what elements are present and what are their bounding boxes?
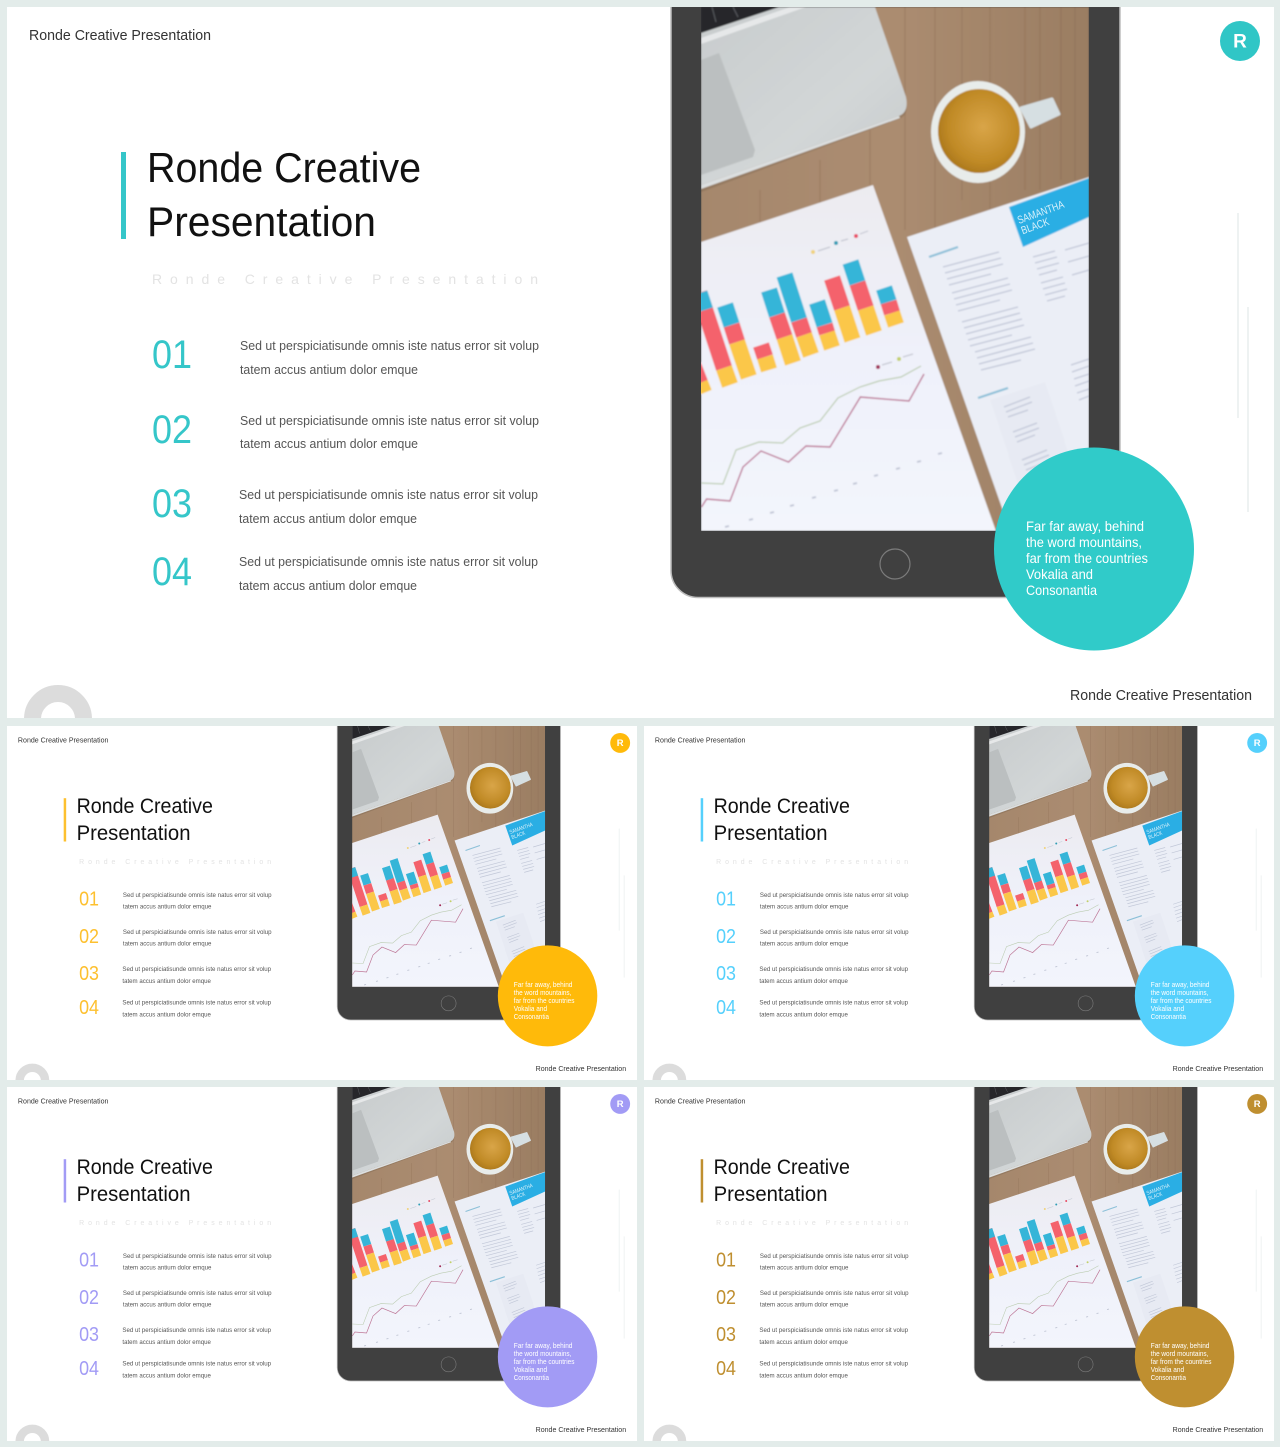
- item 04: 04: [79, 997, 99, 1019]
- item 02: Sed ut perspiciatisunde omnis iste natus error sit volup: [123, 1290, 272, 1297]
- item 02: 02: [716, 926, 736, 948]
- header label: Ronde Creative Presentation: [18, 1096, 108, 1105]
- tablet with desk photo: [671, 0, 1120, 598]
- subtitle: Ronde Creative Presentation: [79, 1220, 271, 1227]
- item 04: 04: [716, 1358, 736, 1380]
- logo badge: R: [617, 738, 624, 749]
- tablet with desk photo: BLACK: [1020, 216, 1051, 237]
- ring decoration: [20, 1429, 45, 1447]
- footer label: Ronde Creative Presentation: [1173, 1064, 1263, 1073]
- logo badge: R: [617, 1099, 624, 1110]
- item 04: [80, 1000, 271, 1018]
- item 03: Sed ut perspiciatisunde omnis iste natus error sit volup: [122, 966, 272, 973]
- logo badge: [610, 733, 630, 753]
- item 03: Sed ut perspiciatisunde omnis iste natus error sit volup: [122, 1327, 272, 1334]
- item 01: [80, 892, 272, 910]
- title accent bar: [64, 1159, 66, 1203]
- tablet with desk photo: SAMANTHA: [509, 1184, 534, 1197]
- title: [78, 798, 212, 840]
- slide 4: purple slide: [7, 1064, 637, 1447]
- title: Presentation: [714, 1183, 828, 1206]
- item 01: 01: [79, 889, 99, 911]
- callout circle: [498, 1306, 597, 1407]
- title: [150, 152, 420, 236]
- item 04: 04: [152, 550, 192, 594]
- callout circle: the word mountains,: [1026, 534, 1142, 550]
- item 02: [716, 929, 908, 947]
- item 01: [153, 340, 538, 376]
- item 03: tatem accus antium dolor emque: [759, 1339, 848, 1346]
- header label: Ronde Creative Presentation: [29, 28, 211, 44]
- tablet with desk photo: BLACK: [1148, 830, 1164, 841]
- item 02: Sed ut perspiciatisunde omnis iste natus error sit volup: [760, 1290, 909, 1297]
- callout circle: Vokalia and: [1151, 1006, 1184, 1013]
- item 03: [79, 1324, 272, 1346]
- item 04: Sed ut perspiciatisunde omnis iste natus error sit volup: [122, 1360, 272, 1367]
- title: Ronde Creative: [714, 1156, 850, 1179]
- slide 1: large teal slide: [7, 0, 1274, 744]
- callout circle: [994, 448, 1194, 650]
- item 01: tatem accus antium dolor emque: [760, 904, 849, 911]
- logo badge: [1247, 733, 1267, 753]
- item 02: 02: [152, 408, 192, 452]
- item 01: [79, 1250, 272, 1272]
- item 04: tatem accus antium dolor emque: [122, 1372, 211, 1379]
- title: Presentation: [714, 822, 828, 845]
- callout circle: [1135, 945, 1234, 1046]
- logo badge: R: [1254, 738, 1261, 749]
- item 04: tatem accus antium dolor emque: [239, 579, 417, 593]
- callout circle: Consonantia: [1151, 1375, 1186, 1382]
- item 03: tatem accus antium dolor emque: [122, 978, 211, 985]
- item 03: [153, 489, 538, 526]
- logo badge: [610, 1094, 630, 1114]
- item 02: tatem accus antium dolor emque: [240, 437, 418, 451]
- callout circle: Far far away, behind: [1026, 518, 1144, 534]
- tablet with desk photo: [974, 703, 1197, 1020]
- callout circle: [1135, 1306, 1234, 1407]
- footer label: Ronde Creative Presentation: [1070, 688, 1252, 704]
- item 03: Sed ut perspiciatisunde omnis iste natus error sit volup: [239, 488, 538, 502]
- title: Presentation: [77, 822, 191, 845]
- item 01: 01: [716, 1250, 736, 1272]
- callout circle: Consonantia: [1151, 1014, 1186, 1021]
- callout circle: the word mountains,: [1151, 1351, 1208, 1358]
- item 01: tatem accus antium dolor emque: [760, 1265, 849, 1272]
- item 04: Sed ut perspiciatisunde omnis iste natus error sit volup: [239, 555, 538, 569]
- item 04: 04: [79, 1358, 99, 1380]
- title: Presentation: [147, 198, 376, 245]
- callout circle: Vokalia and: [514, 1367, 547, 1374]
- title accent bar: [64, 798, 66, 842]
- footer label: Ronde Creative Presentation: [1173, 1425, 1263, 1434]
- item 04: Sed ut perspiciatisunde omnis iste natus error sit volup: [759, 1360, 909, 1367]
- title: [715, 798, 850, 840]
- callout circle: far from the countries: [1151, 1359, 1212, 1366]
- callout circle: Far far away, behind: [514, 982, 573, 989]
- callout circle: Vokalia and: [1026, 566, 1093, 582]
- slide 3: sky blue slide: [644, 703, 1274, 1093]
- callout circle: far from the countries: [1026, 550, 1148, 566]
- item 02: [153, 415, 538, 450]
- item 02: [716, 1287, 909, 1309]
- item 01: Sed ut perspiciatisunde omnis iste natus error sit volup: [240, 339, 539, 353]
- tablet with desk photo: BLACK: [511, 1191, 527, 1202]
- callout circle: far from the countries: [514, 998, 575, 1005]
- item 01: tatem accus antium dolor emque: [123, 904, 212, 911]
- item 02: [80, 929, 272, 947]
- slide 5: gold slide: [644, 1064, 1274, 1447]
- item 01: Sed ut perspiciatisunde omnis iste natus error sit volup: [760, 1253, 909, 1260]
- item 02: Sed ut perspiciatisunde omnis iste natus error sit volup: [240, 414, 539, 428]
- item 02: tatem accus antium dolor emque: [123, 1302, 212, 1309]
- title: Presentation: [77, 1183, 191, 1206]
- tablet with desk photo: [337, 1064, 560, 1381]
- callout circle: Far far away, behind: [1151, 1343, 1210, 1350]
- callout circle: far from the countries: [1151, 998, 1212, 1005]
- subtitle: Ronde Creative Presentation: [716, 859, 908, 866]
- tablet with desk photo: BLACK: [511, 830, 527, 841]
- logo badge: [1220, 21, 1260, 61]
- subtitle: Ronde Creative Presentation: [716, 1220, 908, 1227]
- item 02: 02: [716, 1287, 736, 1309]
- callout circle: the word mountains,: [1151, 990, 1208, 997]
- item 02: tatem accus antium dolor emque: [760, 1302, 849, 1309]
- item 04: tatem accus antium dolor emque: [759, 1011, 848, 1018]
- ring decoration: [657, 1068, 682, 1093]
- item 03: [80, 966, 271, 984]
- item 03: 03: [716, 1324, 736, 1346]
- item 02: tatem accus antium dolor emque: [123, 941, 212, 948]
- item 03: Sed ut perspiciatisunde omnis iste natus error sit volup: [759, 1327, 909, 1334]
- item 04: 04: [716, 997, 736, 1019]
- logo badge: R: [1233, 32, 1247, 52]
- callout circle: Vokalia and: [514, 1006, 547, 1013]
- item 04: [153, 556, 538, 592]
- item 01: tatem accus antium dolor emque: [240, 363, 418, 377]
- title accent bar: [121, 152, 126, 239]
- footer label: Ronde Creative Presentation: [536, 1064, 626, 1073]
- title: Ronde Creative: [147, 144, 421, 191]
- tablet with desk photo: SAMANTHA: [1016, 199, 1066, 227]
- item 01: Sed ut perspiciatisunde omnis iste natus error sit volup: [123, 1253, 272, 1260]
- item 01: [716, 1250, 909, 1272]
- item 04: Sed ut perspiciatisunde omnis iste natus error sit volup: [759, 999, 909, 1006]
- item 03: 03: [152, 482, 192, 526]
- item 04: [716, 1000, 908, 1018]
- item 04: Sed ut perspiciatisunde omnis iste natus error sit volup: [122, 999, 272, 1006]
- item 02: 02: [79, 926, 99, 948]
- tablet with desk photo: SAMANTHA: [1146, 1184, 1171, 1197]
- callout circle: the word mountains,: [514, 1351, 571, 1358]
- callout circle: Vokalia and: [1151, 1367, 1184, 1374]
- title: Ronde Creative: [77, 1156, 213, 1179]
- title: [77, 1156, 213, 1206]
- item 04: [79, 1358, 272, 1380]
- title: [714, 1156, 850, 1206]
- subtitle: Ronde Creative Presentation: [79, 859, 271, 866]
- callout circle: [498, 945, 597, 1046]
- item 02: [79, 1287, 272, 1309]
- callout circle: Far far away, behind: [514, 1343, 573, 1350]
- subtitle: Ronde Creative Presentation: [152, 271, 538, 287]
- item 01: [716, 892, 908, 910]
- tablet with desk photo: [337, 703, 560, 1020]
- item 03: 03: [716, 963, 736, 985]
- tablet with desk photo: SAMANTHA: [509, 823, 534, 836]
- callout circle: Far far away, behind: [1151, 982, 1210, 989]
- item 03: 03: [79, 963, 99, 985]
- item 01: 01: [716, 889, 736, 911]
- item 03: tatem accus antium dolor emque: [122, 1339, 211, 1346]
- item 03: tatem accus antium dolor emque: [759, 978, 848, 985]
- ring decoration: [657, 1429, 682, 1447]
- item 02: Sed ut perspiciatisunde omnis iste natus error sit volup: [760, 929, 909, 936]
- item 01: tatem accus antium dolor emque: [123, 1265, 212, 1272]
- header label: Ronde Creative Presentation: [18, 735, 108, 744]
- tablet with desk photo: BLACK: [1148, 1191, 1164, 1202]
- slide 2: yellow slide: [7, 703, 637, 1093]
- item 02: 02: [79, 1287, 99, 1309]
- callout circle: the word mountains,: [514, 990, 571, 997]
- header label: Ronde Creative Presentation: [655, 1096, 745, 1105]
- item 04: tatem accus antium dolor emque: [759, 1372, 848, 1379]
- item 03: Sed ut perspiciatisunde omnis iste natus error sit volup: [759, 966, 909, 973]
- item 01: 01: [79, 1250, 99, 1272]
- callout circle: Consonantia: [514, 1014, 549, 1021]
- ring decoration: [16, 1064, 50, 1080]
- item 02: tatem accus antium dolor emque: [760, 941, 849, 948]
- item 01: 01: [152, 333, 192, 377]
- item 03: tatem accus antium dolor emque: [239, 512, 417, 526]
- ring decoration: [24, 685, 92, 718]
- item 02: Sed ut perspiciatisunde omnis iste natus error sit volup: [123, 929, 272, 936]
- title: Ronde Creative: [77, 795, 213, 818]
- tablet with desk photo: SAMANTHA: [1146, 823, 1171, 836]
- title accent bar: [701, 1159, 703, 1203]
- header label: Ronde Creative Presentation: [655, 735, 745, 744]
- logo badge: R: [1254, 1099, 1261, 1110]
- logo badge: [1247, 1094, 1267, 1114]
- item 03: 03: [79, 1324, 99, 1346]
- item 04: [716, 1358, 909, 1380]
- item 03: [716, 966, 908, 984]
- callout circle: Consonantia: [514, 1375, 549, 1382]
- footer label: Ronde Creative Presentation: [536, 1425, 626, 1434]
- item 04: tatem accus antium dolor emque: [122, 1011, 211, 1018]
- tablet with desk photo: [974, 1064, 1197, 1381]
- callout circle: Consonantia: [1026, 582, 1097, 598]
- item 03: [716, 1324, 909, 1346]
- title accent bar: [701, 798, 703, 842]
- callout circle: far from the countries: [514, 1359, 575, 1366]
- item 01: Sed ut perspiciatisunde omnis iste natus error sit volup: [123, 892, 272, 899]
- title: Ronde Creative: [714, 795, 850, 818]
- item 01: Sed ut perspiciatisunde omnis iste natus error sit volup: [760, 892, 909, 899]
